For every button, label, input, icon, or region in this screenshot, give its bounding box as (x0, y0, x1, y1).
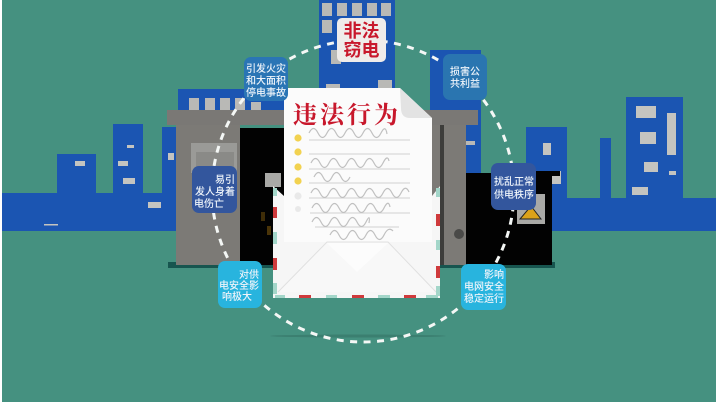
callout: harms public interest: 损害公 (450, 65, 480, 78)
callout: harms public interest: 共利益 (450, 77, 480, 90)
callout: illegal electricity theft: 窃电 (344, 40, 380, 60)
callout: fire and blackout: 引发火灾 (246, 62, 286, 75)
callout: illegal electricity theft (337, 18, 386, 62)
left rear building (178, 89, 293, 111)
list lines and scribbles (309, 128, 410, 240)
callout: fire and blackout (244, 57, 288, 101)
callout: supply safety impact: 电安全影 (219, 279, 259, 292)
callout: supply safety impact: 响极大 (222, 290, 252, 303)
callout: grid stability impact (461, 264, 506, 310)
ground shadow (270, 334, 446, 338)
callout: personal injury: 易引 (215, 173, 235, 186)
right rear building (430, 50, 481, 175)
city skyline right (480, 97, 716, 231)
callout: illegal electricity theft: 非法 (344, 21, 380, 41)
top building (319, 0, 395, 112)
title: 违法行为 (293, 95, 401, 130)
callout: disrupts supply order (491, 163, 536, 210)
callout: supply safety impact (218, 261, 262, 308)
callout: personal injury: 发人身着 (195, 185, 235, 198)
callout: supply safety impact: 对供 (239, 268, 259, 281)
callout: grid stability impact: 电网安全 (464, 280, 504, 293)
power station (167, 110, 560, 268)
callout: disrupts supply order: 扰乱正常 (494, 175, 534, 188)
callout: personal injury: 电伤亡 (194, 197, 224, 210)
dashed circle (212, 40, 514, 342)
list bullets (294, 134, 302, 212)
letter (284, 88, 432, 290)
callout: fire and blackout: 停电事故 (246, 86, 286, 99)
callout: personal injury (192, 166, 237, 213)
callout: grid stability impact: 影响 (484, 268, 504, 281)
envelope (273, 186, 440, 298)
callout: harms public interest (443, 54, 487, 100)
callout: disrupts supply order: 供电秩序 (494, 188, 534, 201)
callout: fire and blackout: 和大面积 (246, 74, 286, 87)
callout: grid stability impact: 稳定运行 (464, 292, 504, 305)
icon: warning triangle (520, 206, 541, 219)
city skyline left (2, 124, 178, 231)
